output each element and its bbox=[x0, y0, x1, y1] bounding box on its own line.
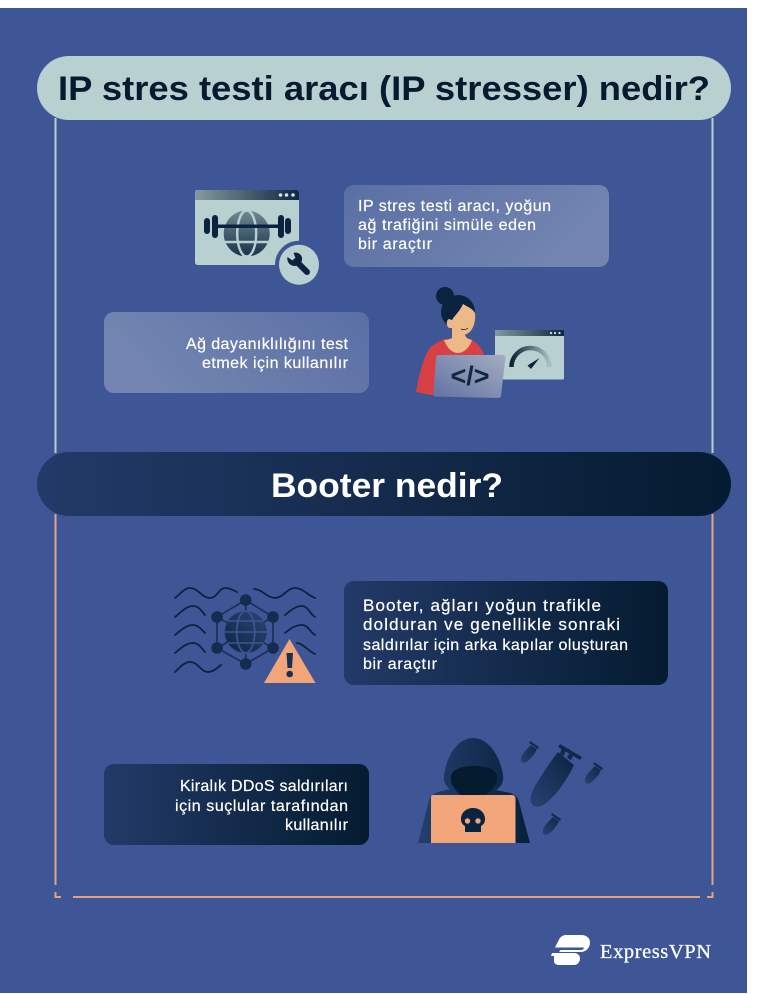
callout: what a stresser is bbox=[344, 185, 609, 267]
heading: Booter bbox=[37, 452, 731, 516]
callout: what a stresser is: IP stres testi aracı, yoğun bbox=[358, 198, 551, 215]
callout: what a stresser is: bir araçtır bbox=[358, 236, 433, 253]
icon: network globe under traffic waves with warning bbox=[175, 588, 316, 683]
callout: DDoS for hire bbox=[104, 764, 369, 845]
logo: ExpressVPN: ExpressVPN bbox=[600, 941, 711, 963]
callout: what a booter is bbox=[344, 581, 668, 685]
heading: IP stresser: IP stres testi aracı (IP stresser) nedir? bbox=[58, 70, 710, 108]
callout: DDoS for hire: Kiralık DDoS saldırıları bbox=[180, 778, 348, 795]
callout: what a booter is: bir araçtır bbox=[363, 656, 438, 673]
heading: IP stresser bbox=[37, 56, 731, 120]
callout: what a booter is: saldırılar için arka kapılar oluşturan bbox=[363, 637, 628, 654]
callout: network resilience: etmek için kullanılır bbox=[202, 355, 349, 372]
callout: what a stresser is: ağ trafiğini simüle eden bbox=[358, 217, 536, 234]
icon: woman with laptop and speed gauge: </> bbox=[450, 361, 490, 391]
icon: hooded hacker with laptop and bombs bbox=[418, 738, 603, 843]
frame: bottom section bbox=[56, 514, 712, 897]
icon: browser with barbell globe and wrench bbox=[195, 190, 323, 289]
callout: DDoS for hire: için suçlular tarafından bbox=[175, 798, 348, 815]
callout: DDoS for hire: kullanılır bbox=[285, 817, 349, 834]
callout: what a booter is: dolduran ve genellikle sonraki bbox=[363, 615, 620, 634]
heading: Booter: Booter nedir? bbox=[271, 467, 503, 505]
callout: network resilience: Ağ dayanıklılığını test bbox=[186, 336, 349, 353]
frame: top section bbox=[56, 118, 712, 453]
icon: woman with laptop and speed gauge bbox=[416, 287, 564, 398]
logo: ExpressVPN bbox=[551, 935, 711, 965]
callout: network resilience bbox=[104, 312, 369, 393]
callout: what a booter is: Booter, ağları yoğun trafikle bbox=[363, 596, 601, 615]
